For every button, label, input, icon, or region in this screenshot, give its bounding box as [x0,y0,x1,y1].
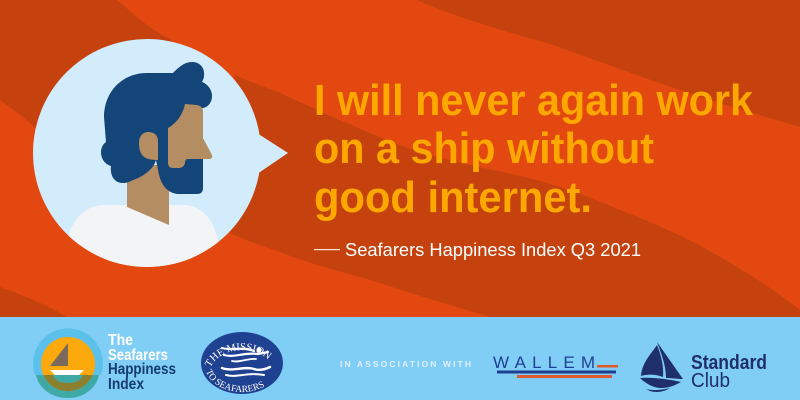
icon: flying angel and waves [222,348,270,376]
attribution: Seafarers Happiness Index Q3 2021 [345,240,641,260]
shirt [68,205,218,267]
logo: Standard Club: Club [691,370,730,392]
neck [127,165,169,225]
ear [139,132,158,160]
logo: The Mission to Seafarers: THE MISSION [204,343,272,366]
bubble tail [255,132,288,175]
icon: sailing ship [640,342,683,392]
wordmark: Happiness [108,361,176,378]
logo: The Mission to Seafarers [201,332,283,394]
hair and beard [101,62,212,194]
quote text: I will never again work [314,76,753,125]
logo: Wallem: WALLEM [493,353,595,372]
face [168,104,212,168]
logo: The Seafarers Happiness Index [33,328,176,398]
logo: Standard Club [640,342,767,392]
icon: boat and sun [33,328,103,398]
wordmark: Index [108,376,144,393]
quote text: on a ship without [314,124,654,173]
logo: The Mission to Seafarers: TO SEAFARERS [206,368,264,392]
association label: IN ASSOCIATION WITH [340,359,471,369]
quote text: good internet. [314,173,592,222]
footer band [0,317,800,400]
wordmark [108,332,176,393]
logo: Wallem [493,353,618,378]
quote text [314,76,753,222]
wordmark: Seafarers [108,347,168,364]
portrait: seafarer [68,62,218,275]
wordmark: The [108,332,133,349]
bubble circle [33,39,261,267]
logo: Standard Club: Standard [691,352,767,374]
quote bubble with seafarer portrait [33,39,288,275]
